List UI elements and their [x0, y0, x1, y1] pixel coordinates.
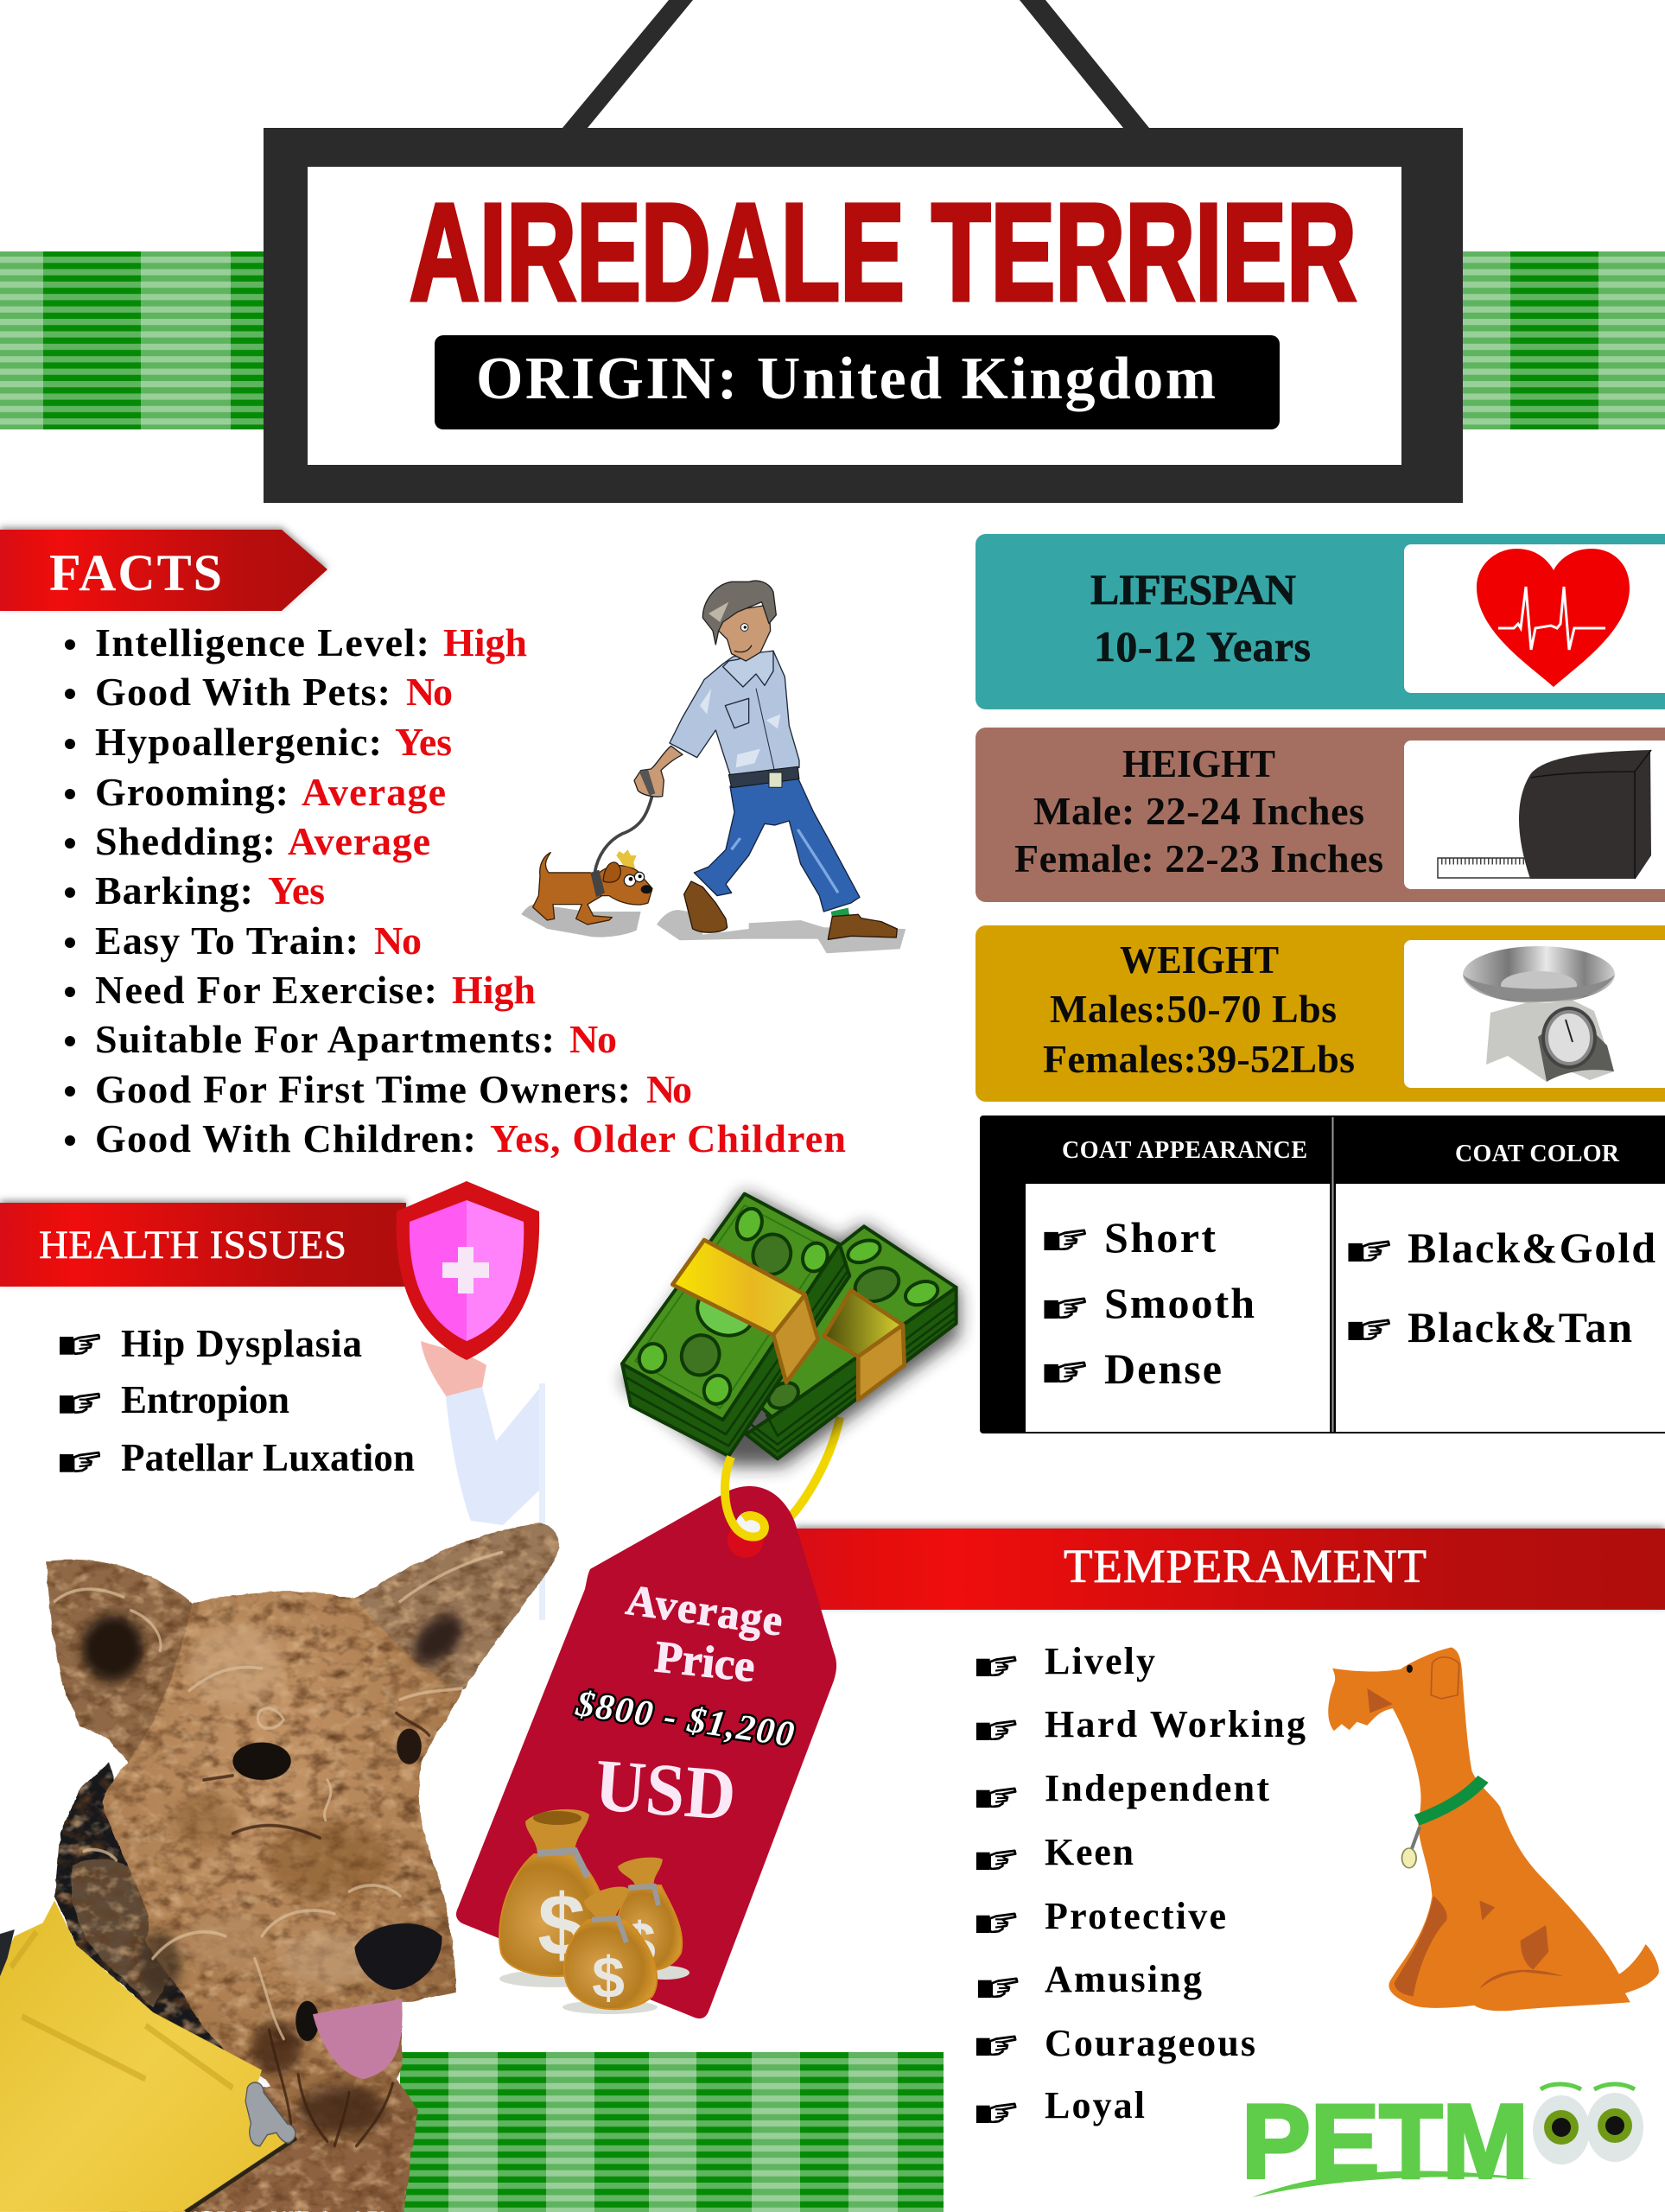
fact: barking: Barking:: [95, 868, 253, 912]
illustration: sleeve holding shield: [421, 1341, 545, 1620]
temperament list: Protective: [1045, 1895, 1226, 1937]
icon: heart with pulse: [1477, 549, 1630, 687]
price tag: Price: [652, 1632, 757, 1692]
bandana: [0, 1900, 296, 2212]
price tag: [456, 1457, 836, 2018]
tag string loop: [725, 1457, 765, 1537]
height text: HEIGHT: [1122, 741, 1275, 785]
temperament list: Independent: [1045, 1767, 1269, 1809]
illustration: airedale photo: [0, 1523, 559, 2212]
height text: Male: 22-24 Inches: [1033, 789, 1364, 833]
back small bag: $: [623, 1910, 656, 1976]
dog fur wisps: [54, 1552, 502, 2146]
health issues list: Entropion: [121, 1378, 289, 1421]
fact: first time owners: No: [646, 1067, 692, 1111]
coat appearance list: Smooth: [1104, 1279, 1255, 1327]
fact: training: No: [374, 918, 422, 963]
dog eyes: [232, 1729, 422, 1780]
health issues list: Hip Dysplasia: [121, 1322, 362, 1365]
health issues banner: HEALTH ISSUES: [39, 1223, 346, 1268]
logo: PETMOO: PETM: [1242, 2082, 1528, 2200]
coat color list: Black&Gold: [1408, 1224, 1655, 1272]
coat appearance list: [1044, 1213, 1255, 1393]
temperament list: Courageous: [1045, 2022, 1255, 2064]
fact: apartments: Suitable For Apartments:: [95, 1017, 555, 1061]
dog tag: [245, 2082, 296, 2146]
temperament list: Keen: [1045, 1831, 1134, 1873]
fact: shedding: [65, 819, 430, 863]
facts list: [65, 620, 846, 1160]
panel: coat table: [980, 1116, 1665, 1433]
coat appearance heading: COAT APPEARANCE: [1062, 1137, 1307, 1164]
fact: children: Good With Children:: [95, 1116, 476, 1160]
title sign frame: [264, 128, 1463, 503]
facts banner: FACTS: [49, 544, 222, 601]
big bag: $: [537, 1877, 586, 1974]
lifespan text: 10-12 Years: [1094, 622, 1311, 671]
green stripe band: bottom: [400, 2052, 944, 2212]
fact: grooming: [65, 770, 446, 814]
front bag: [564, 1887, 657, 2011]
icon: medical shield: [397, 1181, 539, 1360]
fact: hypoallergenic: Hypoallergenic:: [95, 720, 382, 764]
back band: [823, 1290, 905, 1400]
tag text: USD: USD: [592, 1743, 739, 1836]
string behind tag: [791, 1417, 840, 1516]
health issues banner: [0, 1203, 406, 1287]
coat appearance list: Short: [1104, 1213, 1216, 1262]
front band: [672, 1240, 818, 1382]
origin pill: ORIGIN: United Kingdom: [476, 346, 1216, 412]
dog mouth and tongue: [296, 1999, 403, 2079]
panel: height: [975, 728, 1665, 902]
coat color heading: COAT COLOR: [1455, 1141, 1620, 1167]
fact: pets: Good With Pets:: [95, 670, 391, 714]
fact: shedding: Shedding:: [95, 819, 276, 863]
tag text: price range: $800 - $1,200: [573, 1684, 797, 1755]
icon: money bags: [499, 1809, 690, 2014]
temperament list: Lively: [1045, 1640, 1155, 1682]
fact: barking: Yes: [268, 868, 325, 912]
icon: tape measure: [1438, 750, 1651, 879]
temperament list: Hard Working: [1045, 1703, 1306, 1745]
front stack: [622, 1194, 849, 1456]
coat color list: [1348, 1224, 1655, 1351]
back stack: [702, 1226, 956, 1459]
fact: grooming: Average: [302, 770, 446, 814]
lifespan text: LIFESPAN: [1090, 565, 1296, 613]
facts banner: [0, 530, 327, 611]
tag text: average price: Average: [623, 1575, 785, 1645]
fact: barking: [65, 868, 325, 912]
weight text: Males:50-70 Lbs: [1050, 987, 1337, 1031]
fact: exercise: High: [452, 968, 536, 1012]
weight text: [1043, 938, 1355, 1081]
fact: apartments: No: [569, 1017, 617, 1061]
fact: training: Easy To Train:: [95, 918, 359, 963]
weight text: WEIGHT: [1120, 938, 1279, 982]
panel: weight: [975, 925, 1665, 1102]
front bag: $: [592, 1945, 625, 2011]
coat appearance list: Dense: [1104, 1344, 1222, 1393]
origin pill: [435, 335, 1280, 429]
fact: exercise: Need For Exercise:: [95, 968, 437, 1012]
health issues list: [60, 1322, 415, 1479]
height text: Female: 22-23 Inches: [1014, 836, 1383, 880]
hanging sign strings: [562, 0, 1149, 128]
fact: grooming: Grooming:: [95, 770, 289, 814]
temperament list: Loyal: [1045, 2084, 1145, 2126]
green stripe band: left: [0, 251, 264, 429]
temperament list: [976, 1640, 1306, 2126]
illustration: money stacks: [622, 1192, 959, 1466]
fact: children: Yes, Older Children: [490, 1116, 846, 1160]
panel: lifespan: [975, 534, 1665, 709]
illustration: man walking small dog: [521, 581, 906, 953]
fact: intelligence: High: [443, 620, 527, 664]
fact: pets: No: [406, 670, 453, 714]
green stripe band: right: [1463, 251, 1665, 429]
fact: intelligence: Intelligence Level:: [95, 620, 429, 664]
dog nose: [354, 1923, 442, 1990]
coat color list: Black&Tan: [1408, 1303, 1632, 1351]
fact: first time owners: Good For First Time Owners:: [95, 1067, 631, 1111]
back small bag: [616, 1858, 682, 1976]
weight text: Females:39-52Lbs: [1043, 1037, 1355, 1081]
fact: hypoallergenic: Yes: [395, 720, 452, 764]
temperament list: Amusing: [1045, 1958, 1202, 2000]
lifespan text: [1090, 565, 1311, 671]
fact: children: [65, 1116, 846, 1160]
dog fur shading: [82, 1604, 470, 2135]
fact: shedding: Average: [288, 819, 430, 863]
height text: [1014, 741, 1383, 880]
big bag: [499, 1809, 608, 1976]
health issues list: Patellar Luxation: [121, 1436, 415, 1479]
temperament banner: [795, 1529, 1665, 1610]
illustration: orange sitting terrier: [1328, 1648, 1659, 2011]
temperament banner: TEMPERAMENT: [1064, 1540, 1427, 1592]
icon: kitchen scale: [1463, 946, 1615, 1082]
